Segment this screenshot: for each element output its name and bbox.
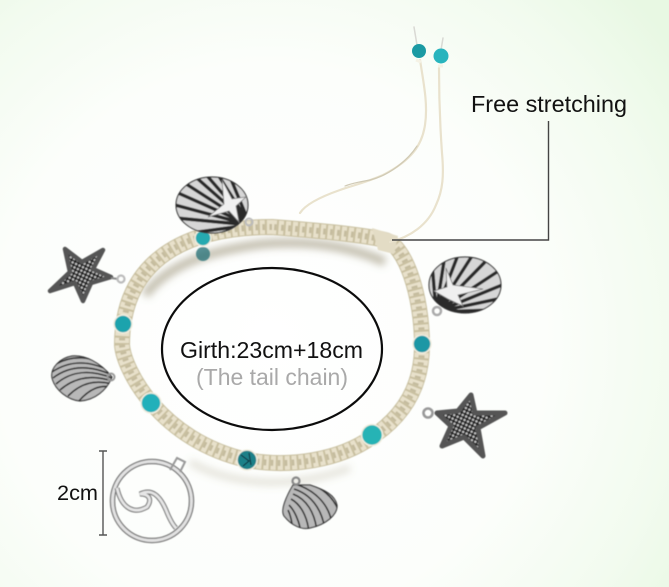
charm: left starfish [50, 249, 124, 301]
label: Free stretching [471, 91, 627, 117]
girth ellipse callout [162, 268, 382, 430]
charm: wave circle [112, 458, 192, 540]
charm: right scallop shell [429, 255, 502, 318]
bead shadow [196, 247, 210, 261]
knot [372, 228, 398, 254]
cord ring [122, 227, 422, 463]
bracket [99, 451, 107, 535]
tie strings [300, 27, 443, 242]
size label: 2cm [57, 481, 98, 505]
turquoise beads [114, 230, 431, 470]
string beads [412, 44, 448, 66]
girth text: Girth:23cm+18cm [180, 337, 363, 363]
tail chain note: (The tail chain) [196, 364, 348, 390]
charm: top scallop shell [174, 176, 254, 234]
charm: left clam shell [52, 356, 114, 402]
free stretching callout [392, 91, 627, 240]
bracelet [114, 227, 431, 470]
size dimension [57, 451, 107, 535]
leader line [392, 121, 548, 240]
charm: right starfish [424, 395, 505, 456]
charm: bottom clam shell [283, 478, 340, 532]
bracelet shadows [145, 243, 385, 482]
